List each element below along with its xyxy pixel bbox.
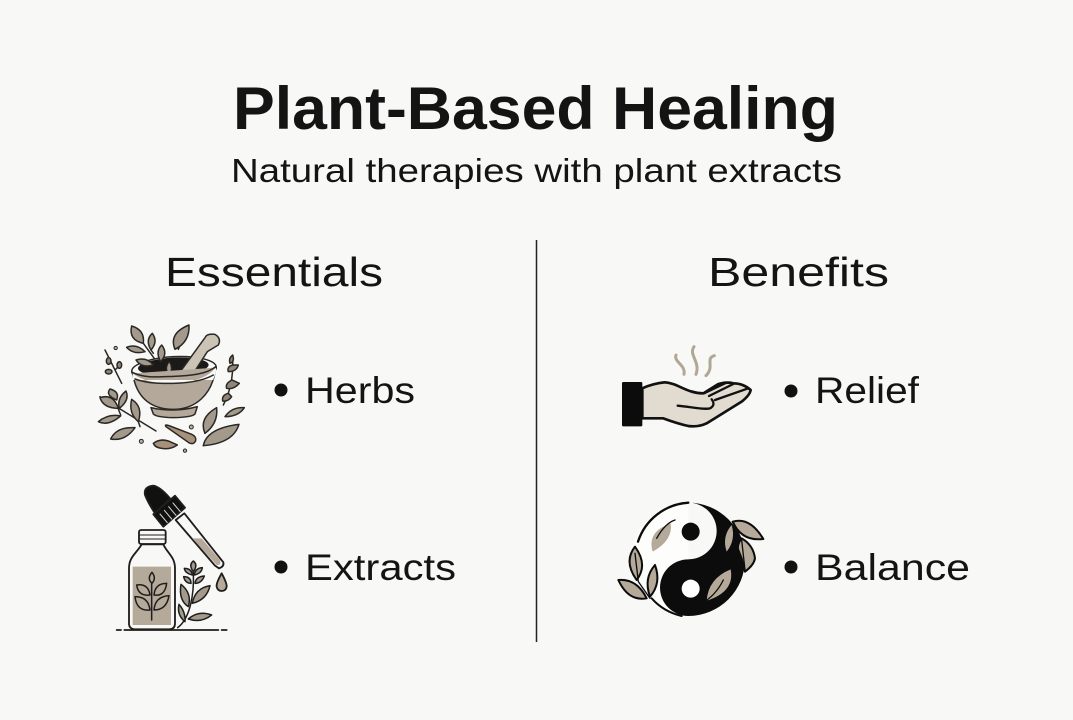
subtitle: Natural therapies with plant extracts [231, 152, 842, 189]
label: Herbs: Herbs [305, 370, 415, 411]
heading: Benefits: Benefits [708, 249, 889, 295]
icon: mortar and pestle with herbs [98, 325, 244, 452]
icon: dropper bottle [117, 486, 227, 630]
title: Plant-Based Healing [233, 75, 838, 142]
rim back [131, 354, 217, 384]
label: Relief [784, 370, 920, 411]
label: Extracts: Extracts [305, 547, 456, 588]
label: Balance: Balance [815, 547, 970, 588]
label: Relief: Relief [815, 370, 920, 411]
icon: open hand with steam [622, 347, 751, 426]
icon: yin-yang with leaves [618, 503, 763, 616]
heading: Essentials: Essentials [165, 249, 383, 295]
